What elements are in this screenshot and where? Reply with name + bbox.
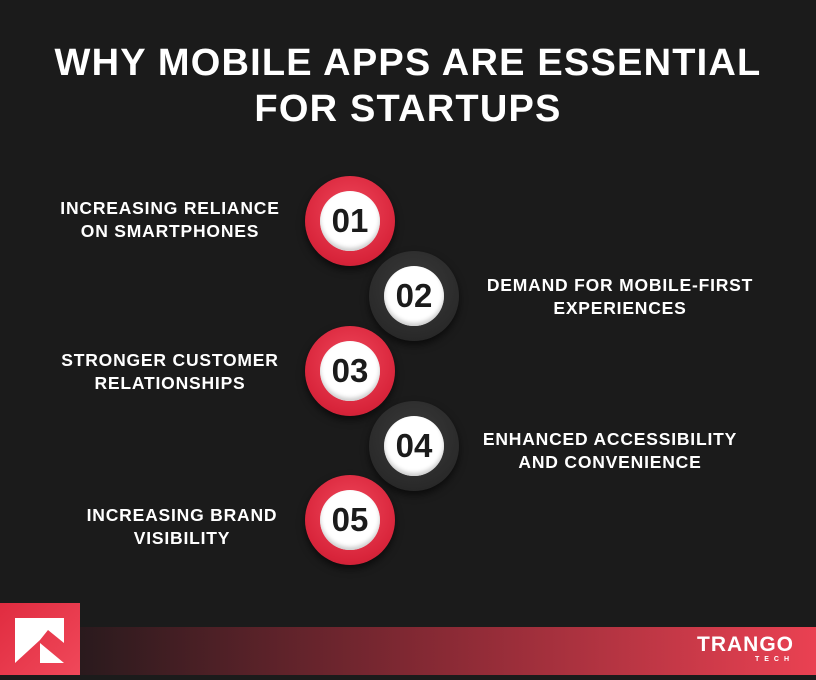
circle 05 xyxy=(305,475,395,565)
logo text: TECH xyxy=(755,656,794,663)
label 02: DEMAND FOR MOBILE-FIRST xyxy=(487,275,753,295)
label 05: INCREASING BRAND xyxy=(87,505,277,525)
label 01: INCREASING RELIANCE xyxy=(60,198,280,218)
label 02 xyxy=(487,275,753,318)
circle 02: 02 xyxy=(396,277,432,314)
circle 04: 04 xyxy=(396,427,432,464)
label 01: ON SMARTPHONES xyxy=(81,221,259,241)
icon: arrow xyxy=(15,618,64,663)
circle 03 xyxy=(305,326,395,416)
label 03 xyxy=(61,350,279,393)
circle 04 xyxy=(369,401,459,491)
label 03: STRONGER CUSTOMER xyxy=(61,350,279,370)
footer bar xyxy=(80,627,816,675)
circle 02 xyxy=(369,251,459,341)
title xyxy=(54,42,761,130)
logo text: TRANGO xyxy=(697,633,794,656)
label 04: ENHANCED ACCESSIBILITY xyxy=(483,429,737,449)
label 01 xyxy=(60,198,280,241)
title: FOR STARTUPS xyxy=(254,88,562,130)
title: WHY MOBILE APPS ARE ESSENTIAL xyxy=(55,42,761,84)
label 03: RELATIONSHIPS xyxy=(94,373,246,393)
label 04 xyxy=(483,429,737,472)
circle 05: 05 xyxy=(332,501,368,538)
logo square xyxy=(0,603,80,675)
label 05: VISIBILITY xyxy=(134,528,230,548)
label 05 xyxy=(87,505,277,548)
circle 01 xyxy=(305,176,395,266)
label 02: EXPERIENCES xyxy=(553,298,687,318)
circle 03: 03 xyxy=(332,352,368,389)
circle 01: 01 xyxy=(332,202,368,239)
label 04: AND CONVENIENCE xyxy=(518,452,702,472)
